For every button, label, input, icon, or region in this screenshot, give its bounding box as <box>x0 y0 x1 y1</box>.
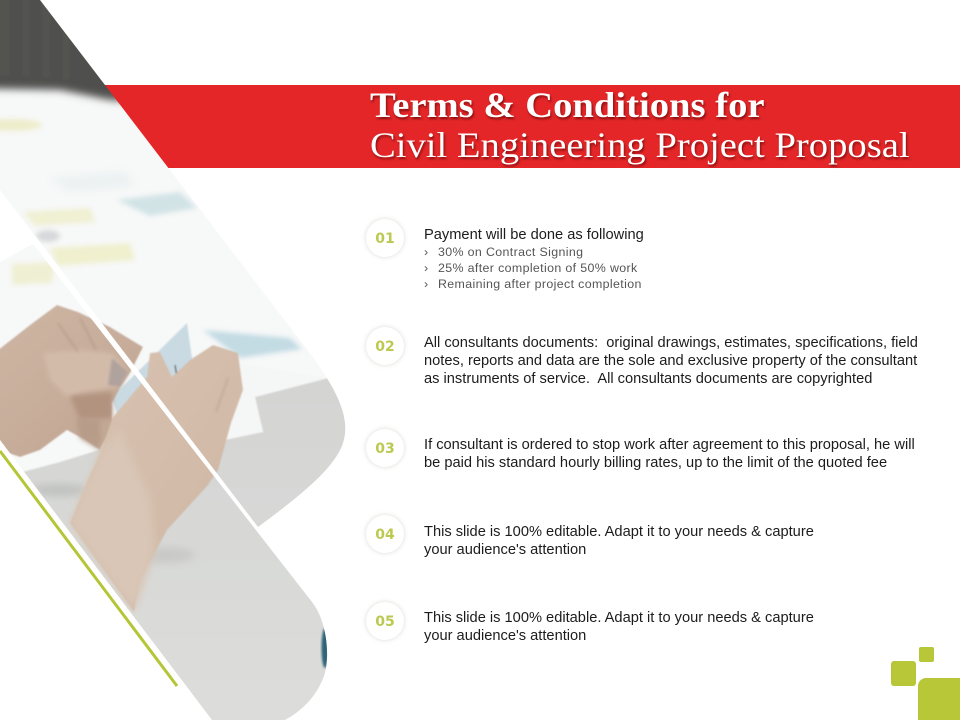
item 3 text: If consultant is ordered to stop work after agreement to this proposal, he will <box>424 437 915 453</box>
badge 01: 01 <box>375 231 395 247</box>
badge 01 <box>366 219 404 257</box>
item 5 text <box>424 610 814 644</box>
item 1 text: › <box>424 261 428 275</box>
item 5 text: This slide is 100% editable. Adapt it to your needs & capture <box>424 610 814 626</box>
item 2 text <box>424 334 918 386</box>
badge 04: 04 <box>375 527 395 543</box>
badge 03: 03 <box>375 441 395 457</box>
item 2 text: All consultants documents: original drawings, estimates, specifications, field <box>424 334 918 350</box>
badge 02 <box>366 327 404 365</box>
badge 03 <box>366 429 404 467</box>
item 1 text: Payment will be done as following <box>424 227 644 243</box>
badge 05 <box>366 602 404 640</box>
title line 1: Terms & Conditions for <box>370 85 765 125</box>
item 1 text: Remaining after project completion <box>438 277 642 291</box>
corner squares decoration <box>891 647 960 720</box>
item 4 text: your audience's attention <box>424 542 586 558</box>
title line 2: Civil Engineering Project Proposal <box>370 125 910 165</box>
badge 02: 02 <box>375 339 395 355</box>
badge 04 <box>366 515 404 553</box>
item 3 text <box>424 437 915 471</box>
photo panel: hands holding a card <box>0 0 346 720</box>
item 1 text: 30% on Contract Signing <box>438 245 583 259</box>
item 1 text: › <box>424 277 428 291</box>
item 1 text: 25% after completion of 50% work <box>438 261 638 275</box>
red title band <box>0 85 960 168</box>
item 4 text: This slide is 100% editable. Adapt it to your needs & capture <box>424 524 814 540</box>
item 1 text <box>424 227 644 291</box>
title <box>370 85 910 168</box>
item 1 text: › <box>424 245 428 259</box>
badge 05: 05 <box>375 614 395 630</box>
item 2 text: as instruments of service. All consultants documents are copyrighted <box>424 370 872 386</box>
item 4 text <box>424 524 814 558</box>
item 2 text: notes, reports and data are the sole and exclusive property of the consultant <box>424 352 917 368</box>
item 3 text: be paid his standard hourly billing rates, up to the limit of the quoted fee <box>424 455 887 471</box>
green diagonal accent line <box>0 451 177 686</box>
item 5 text: your audience's attention <box>424 628 586 644</box>
